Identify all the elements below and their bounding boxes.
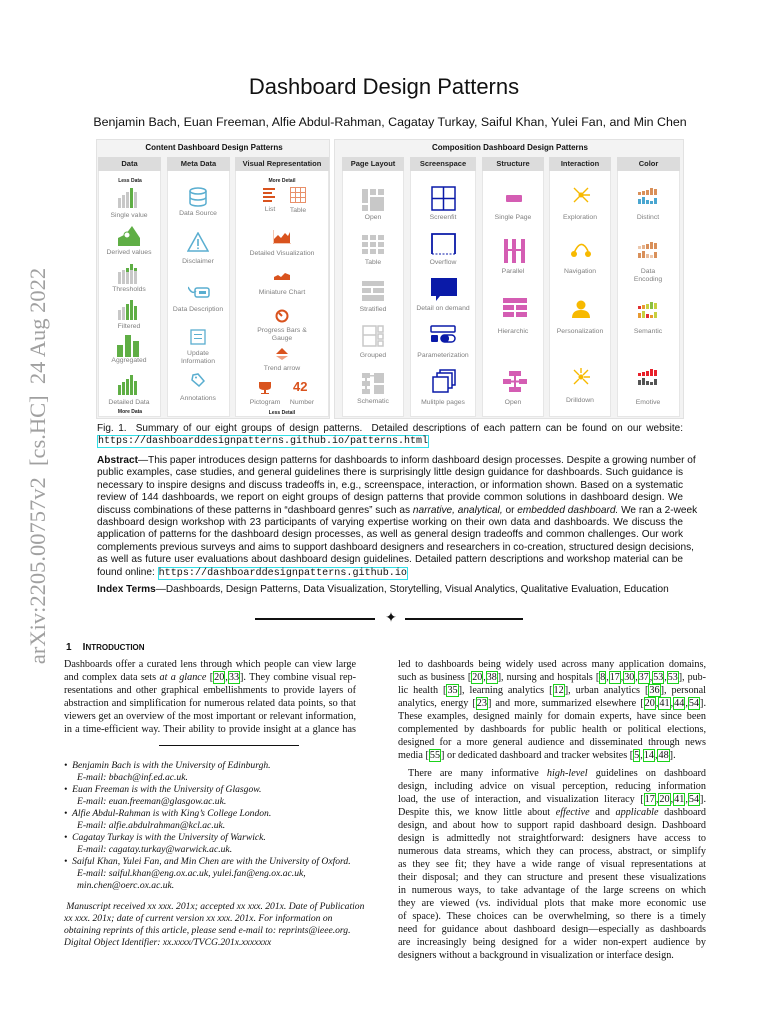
- column: Color: Distinct: [637, 214, 659, 221]
- column: Meta Data: Disclaimer: [182, 258, 214, 265]
- icon: stratified: [362, 281, 384, 301]
- panel heading: composition: Composition Dashboard Design Patterns: [432, 143, 588, 152]
- title: Dashboard Design Patterns: [249, 74, 519, 99]
- abstract: Abstract—This paper introduces design patterns for dashboards to inform dashboard design processes. Despite a growing number of: [97, 455, 696, 466]
- column: Meta Data: Update: [187, 350, 209, 357]
- right column body text: are increasingly being designed for a wider non-expert audience by: [398, 937, 706, 948]
- column: Page Layout: [342, 157, 404, 417]
- column: Structure: [482, 157, 544, 417]
- side arXiv identifier: arXiv:2205.00757v2 [cs.HC] 24 Aug 2022: [25, 268, 50, 664]
- column: Data: Filtered: [118, 323, 140, 330]
- icon: exploration: [571, 185, 591, 205]
- icon: aggregated: [117, 335, 139, 357]
- right column body text: such as business [20,38], nursing and hospitals [8,17,30,37,53,53], pub-: [398, 672, 706, 683]
- column: Meta Data: Annotations: [180, 395, 216, 402]
- icon: table: [290, 187, 306, 203]
- right column body text: lic health [35], learning analytics [12], urban analytics [36], personal: [398, 685, 706, 696]
- column: Visual Representation: Less Detail: [269, 410, 295, 416]
- icon: detailed data: [118, 375, 137, 395]
- column: Visual Representation: Pictogram: [250, 399, 280, 406]
- icon: trend arrow: [276, 348, 288, 360]
- divider with diamond: ✦: [385, 611, 397, 626]
- column: Page Layout: Schematic: [357, 398, 389, 405]
- column: Structure: Hierarchic: [498, 328, 528, 335]
- footnotes: author affiliations: [64, 760, 356, 892]
- right column body text: There are many informative high-level guidelines on dashboard: [408, 768, 706, 779]
- column: Color: Color: [639, 159, 658, 168]
- column: Interaction: Drilldown: [566, 397, 594, 404]
- column: Color: [617, 157, 680, 417]
- left column body text: and complex data sets at a glance [20,33]. They combine visual rep-: [64, 672, 356, 683]
- right column body text: they are viewed (vs. individual plots that make more economic use: [398, 898, 706, 909]
- icon: emotive colors: [638, 368, 660, 386]
- icon: schematic: [362, 373, 384, 394]
- column: Meta Data: [167, 157, 230, 417]
- right column body text: as they see fit; they have a wide range of visual representations at: [398, 859, 706, 870]
- column: Screenspace: Overflow: [430, 259, 456, 266]
- abstract: application of patterns for the dashboard design processes, as well as general design tradeoffs and common challenges. Our work: [97, 529, 683, 540]
- abstract: public examples, case studies, and general guidelines there is surprisingly little design guidance for dashboards. Such guidance is: [97, 467, 683, 478]
- manuscript note: Digital Object Identifier: xx.xxxx/TVCG.201x.xxxxxxx: [64, 937, 271, 948]
- icon: open structure: [503, 371, 527, 392]
- footnotes: author affiliations: • Saiful Khan, Yulei Fan, and Min Chen are with the University of Oxford.: [64, 856, 351, 867]
- manuscript note: Manuscript received xx xxx. 201x; accepted xx xxx. 201x. Date of Publication: [66, 901, 364, 912]
- right column body text: of space). These choices can be overwhelming, so there is a timely: [398, 911, 706, 922]
- column: Page Layout: Table: [365, 259, 381, 266]
- icon: thresholds: [118, 264, 137, 284]
- column: Visual Representation: More Detail: [269, 178, 295, 184]
- column: Screenspace: Mulitple pages: [421, 399, 465, 406]
- right column body text: These examples, designed mainly for domain experts, have since been: [398, 711, 706, 722]
- column: Data: Less Data: [118, 178, 142, 184]
- left column body text: [64, 658, 356, 736]
- right column body text: designed for a more general audience and disseminated through news: [398, 737, 706, 748]
- column: Color: Emotive: [636, 399, 660, 406]
- abstract: as well as future user evaluations about dashboard design guidelines. Detailed pattern descriptions and workshop material can be: [97, 554, 683, 565]
- column: Screenspace: Screenspace: [420, 159, 466, 168]
- icon: drilldown: [571, 367, 591, 387]
- right column body text: Despite this, we know little about effective and applicable dashboard: [398, 807, 706, 818]
- column: Screenspace: Parameterization: [417, 352, 469, 359]
- abstract: necessary to inspire designs and discuss tradeoffs in, e.g., screenspace, interaction, or information shown. Based on a systematic: [97, 480, 683, 491]
- panel: composition dashboard design patterns: [334, 139, 684, 419]
- icon: navigation: [570, 241, 592, 257]
- figure 1: design patterns overview: [96, 139, 684, 419]
- column: Visual Representation: [235, 157, 329, 417]
- column: Page Layout: Page Layout: [351, 159, 395, 168]
- right column body text: numerous data streams, which they can process, abstract, or simplify: [398, 846, 706, 857]
- column: Visual Representation: Miniature Chart: [259, 289, 305, 296]
- left column body text: in a time-efficient way. Their ability to provide insight at a glance has: [64, 724, 356, 735]
- column: Color: Semantic: [634, 328, 662, 335]
- icon: parameterization: [430, 325, 456, 343]
- icon: overflow: [431, 233, 456, 254]
- icon: screenfit: [431, 186, 456, 211]
- footnotes: author affiliations: min.chen@oerc.ox.ac.uk.: [77, 880, 174, 891]
- icon: disclaimer: [187, 232, 209, 252]
- right column body text: designers without a background in visualization or interface design.: [398, 950, 674, 961]
- column: Interaction: Personalization: [557, 328, 603, 335]
- right column body text: design, including advice on visual perception, reducing information: [398, 781, 706, 792]
- footnotes: author affiliations: E-mail: alfie.abdulrahman@kcl.ac.uk.: [77, 820, 225, 831]
- index terms: Index Terms—Dashboards, Design Patterns, Data Visualization, Storytelling, Visual Analytics, Qualitative Evaluation, Education: [97, 584, 669, 595]
- right column body text: design, and about how to support rapid dashboard design. Dashboard: [398, 820, 706, 831]
- figure caption: [97, 423, 683, 448]
- column: Meta Data: Data Source: [179, 210, 217, 217]
- icon: progress gauge: [276, 310, 288, 322]
- column: Visual Representation: Number: [290, 399, 314, 406]
- column: Data: Detailed Data: [108, 399, 150, 406]
- left column body text: resentations and other graphical embellishments to provide layers of: [64, 685, 356, 696]
- icon: distinct colors: [638, 187, 660, 205]
- abstract: [97, 455, 683, 580]
- icon: update information: [190, 329, 206, 345]
- column: Interaction: [549, 157, 611, 417]
- abstract: dashboard design workshop with 23 participants of varying expertise working on their own data and dashboards. We discuss the: [97, 517, 683, 528]
- footnotes: author affiliations: E-mail: bbach@inf.ed.ac.uk.: [77, 772, 188, 783]
- number 42: 42: [293, 379, 307, 394]
- icon: detailed visualization: [273, 230, 291, 244]
- right column body text: their disposal; and they can structure and present these visualizations: [398, 872, 706, 883]
- right column body text: complemented by dashboards for public health or political elections,: [398, 724, 706, 735]
- icon: detail on demand: [431, 278, 457, 301]
- right column body text: design is admittedly not straightforward: designers have access to: [398, 833, 706, 844]
- column: Screenspace: Detail on demand: [416, 305, 470, 312]
- column: Structure: Open: [505, 399, 521, 406]
- column: Visual Representation: Table: [290, 207, 306, 214]
- manuscript note: obtaining reprints of this article, please send e-mail to: reprints@ieee.org.: [64, 925, 350, 936]
- icon: list: [263, 188, 275, 202]
- column: Meta Data: Meta Data: [181, 159, 216, 168]
- column: Data: Derived values: [107, 249, 151, 256]
- column: Structure: Parallel: [502, 268, 524, 275]
- footnotes: author affiliations: E-mail: cagatay.turkay@warwick.ac.uk.: [77, 844, 232, 855]
- footnote rule: [159, 745, 299, 746]
- authors: Benjamin Bach, Euan Freeman, Alfie Abdul-Rahman, Cagatay Turkay, Saiful Khan, Yulei Fan, and Min Chen: [93, 115, 687, 129]
- icon: hierarchic: [503, 298, 527, 317]
- icon: parallel: [504, 239, 525, 263]
- column: Meta Data: Information: [181, 358, 215, 365]
- left column body text: Dashboards offer a curated lens through which people can view large: [64, 659, 356, 670]
- abstract: found online: https://dashboarddesignpatterns.github.io: [97, 567, 407, 579]
- panel heading: content: Content Dashboard Design Patterns: [145, 143, 283, 152]
- section heading: introduction: 1 INTRODUCTION: [66, 642, 145, 653]
- right column body text: media [55] or dedicated dashboard and tracker websites [5,14,48].: [398, 750, 676, 761]
- column: Color: Data: [641, 268, 655, 275]
- icon: open layout: [362, 189, 384, 211]
- column: Page Layout: Stratified: [360, 306, 386, 313]
- column: Page Layout: Grouped: [360, 352, 386, 359]
- column: Interaction: Exploration: [563, 214, 597, 221]
- footnotes: author affiliations: E-mail: saiful.khan@eng.ox.ac.uk, yulei.fan@eng.ox.ac.uk,: [77, 868, 306, 879]
- column: Page Layout: Open: [365, 214, 381, 221]
- column: Data: [98, 157, 161, 417]
- footnotes: author affiliations: • Alfie Abdul-Rahman is with King’s College London.: [64, 808, 271, 819]
- column: Visual Representation: Visual Representation: [243, 159, 321, 168]
- manuscript note: [64, 901, 356, 949]
- right column body text: need for guidance about dashboard design—especially as dashboards: [398, 924, 706, 935]
- panel: content dashboard design patterns: [96, 139, 330, 419]
- abstract: discuss combinations of these patterns in “dashboard genres” such as narrative, analytical, or embedded dashboard. We ran a 2-week: [97, 505, 697, 516]
- footnotes: author affiliations: E-mail: euan.freeman@glasgow.ac.uk.: [77, 796, 226, 807]
- column: Visual Representation: Progress Bars & Gauge: [257, 327, 307, 342]
- icon: annotations: [191, 373, 205, 387]
- column: Meta Data: Data Description: [173, 306, 223, 313]
- abstract: complements previous surveys and aims to support dashboard designers and researchers in co-creation, structured design decisions,: [97, 542, 694, 553]
- column: Data: Thresholds: [112, 286, 146, 293]
- column: Screenspace: [410, 157, 476, 417]
- icon: miniature chart: [274, 273, 290, 280]
- icon: personalization: [572, 300, 590, 318]
- column: Data: Data: [121, 159, 138, 168]
- icon: semantic colors: [638, 301, 660, 319]
- column: Data: Single value: [110, 212, 148, 219]
- column: Data: Aggregated: [111, 357, 147, 364]
- icon: grouped: [362, 325, 384, 347]
- icon: data encoding: [638, 241, 660, 259]
- icon: derived values: [118, 226, 140, 246]
- left column body text: abstraction and simplification for numerous related data points, so that: [64, 698, 356, 709]
- footnotes: author affiliations: • Benjamin Bach is with the University of Edinburgh.: [64, 760, 271, 771]
- right column body text: load, the use of interaction, and visualization literacy [17,20,41,54].: [398, 794, 706, 805]
- column: Structure: Single Page: [495, 214, 531, 221]
- right column body text: in numerous ways, to take advantage of the large screens on which: [398, 885, 706, 896]
- figure caption: Fig. 1. Summary of our eight groups of design patterns. Detailed descriptions of each pattern can be found on our website:: [97, 423, 683, 434]
- footnotes: author affiliations: • Euan Freeman is with the University of Glasgow.: [64, 784, 261, 795]
- footnotes: author affiliations: • Cagatay Turkay is with the University of Warwick.: [64, 832, 266, 843]
- icon: data source: [189, 187, 207, 207]
- column: Structure: Structure: [496, 159, 530, 168]
- right column body text: analytics, energy [23] and more, summarized elsewhere [20,41,44,54].: [398, 698, 706, 709]
- icon: table layout: [362, 235, 384, 254]
- icon: single page: [506, 195, 522, 202]
- right column body text: led to dashboards being widely used across many application domains,: [398, 659, 706, 670]
- column: Data: More Data: [118, 409, 142, 415]
- icon: multiple pages: [432, 369, 456, 393]
- column: Screenspace: Screenfit: [430, 214, 456, 221]
- manuscript note: xx xxx. 201x; date of current version xx xxx. 201x. For information on: [64, 913, 332, 924]
- column: Visual Representation: Trend arrow: [264, 365, 300, 372]
- figure caption: https://dashboarddesignpatterns.github.io/patterns.html: [98, 436, 428, 447]
- column: Interaction: Interaction: [561, 159, 599, 168]
- icon: data description: [188, 286, 210, 298]
- column: Interaction: Navigation: [564, 268, 596, 275]
- column: Visual Representation: Detailed Visualization: [250, 250, 314, 257]
- column: Visual Representation: List: [265, 206, 275, 213]
- icon: pictogram: [259, 382, 271, 394]
- icon: filtered: [118, 300, 137, 320]
- icon: single value: [118, 188, 137, 208]
- column: Color: Encoding: [634, 276, 662, 283]
- right column body text: [398, 658, 706, 962]
- left column body text: viewers get an overview of the most important or relevant information,: [64, 711, 356, 722]
- abstract: review of 144 dashboards, we report on eight groups of design patterns that provide common solutions in dashboard design. We: [97, 492, 683, 503]
